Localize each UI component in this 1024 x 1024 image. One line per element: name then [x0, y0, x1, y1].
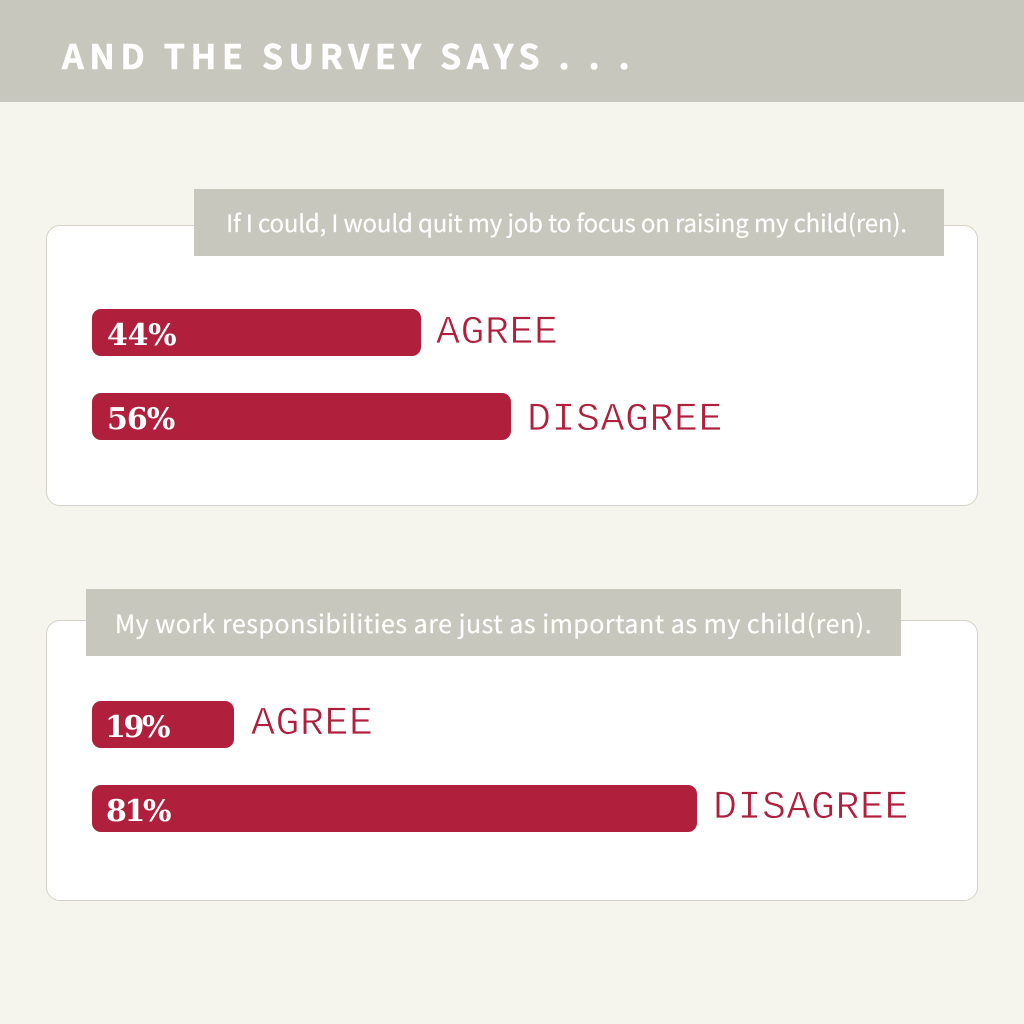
panel: work responsibilities question	[46, 620, 978, 901]
label: disagree: DISAGREE	[527, 398, 723, 443]
bar: 19% agree: 19%	[105, 710, 168, 744]
question 1	[194, 189, 944, 256]
title: AND THE SURVEY SAYS . . .	[62, 30, 635, 79]
label: agree: AGREE	[251, 702, 374, 747]
bar: 81% disagree: 81%	[106, 794, 169, 828]
panel: quit job question	[46, 225, 978, 506]
title banner	[0, 0, 1024, 102]
bar: 44% agree: 44%	[107, 318, 176, 352]
bar: 56% disagree	[92, 393, 511, 440]
bar: 19% agree	[92, 701, 234, 748]
question 2	[86, 589, 901, 656]
question 1: If I could, I would quit my job to focus on raising my child(ren).	[226, 204, 907, 239]
label: agree: AGREE	[436, 311, 559, 356]
bar: 81% disagree	[92, 785, 697, 832]
bar: 56% disagree: 56%	[107, 402, 174, 436]
bar: 44% agree	[92, 309, 421, 356]
label: disagree: DISAGREE	[713, 786, 909, 831]
question 2: My work responsibilities are just as important as my child(ren).	[115, 605, 872, 641]
